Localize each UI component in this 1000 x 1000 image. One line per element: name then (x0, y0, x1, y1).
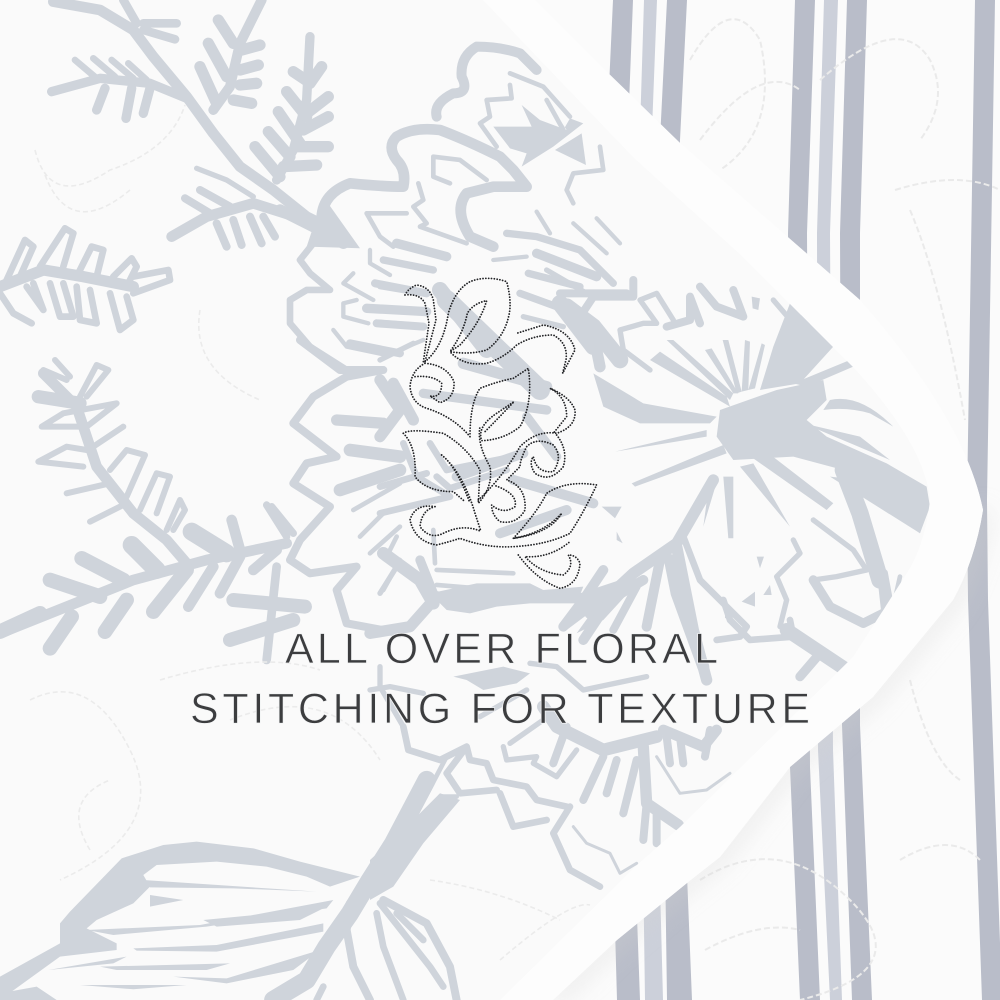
quilt stitching (30, 105, 590, 960)
big flower centre mass (717, 380, 930, 533)
background stitching (690, 19, 1000, 1000)
white binding (483, 0, 983, 1000)
motif bottom small leaf (518, 542, 580, 588)
middle flower lower body (380, 270, 620, 603)
quilt shadow (553, 510, 983, 1000)
bottom left leaf (0, 780, 457, 1000)
motif left spiral and middle leaf (410, 363, 530, 441)
ferns top left (0, 0, 333, 330)
dotted stitch motif (403, 278, 597, 588)
headline line 1: ALL OVER FLORAL (285, 625, 718, 673)
motif bottom sweep and lower right leaf (410, 484, 597, 547)
big flower small petal marks (602, 297, 772, 618)
motif right spirals (478, 388, 575, 522)
headline (190, 625, 810, 733)
motif lower left leaf (403, 427, 491, 532)
motif top left leaf (405, 285, 436, 362)
lower left fern branches (0, 340, 400, 660)
big flower (560, 280, 930, 680)
lower flower (370, 560, 730, 900)
background stripes (603, 0, 1000, 1000)
big flower spokes (615, 340, 923, 538)
headline line 2: STITCHING FOR TEXTURE (190, 685, 810, 733)
motif top leaf (425, 278, 575, 373)
middle flower upper petals (280, 47, 620, 370)
